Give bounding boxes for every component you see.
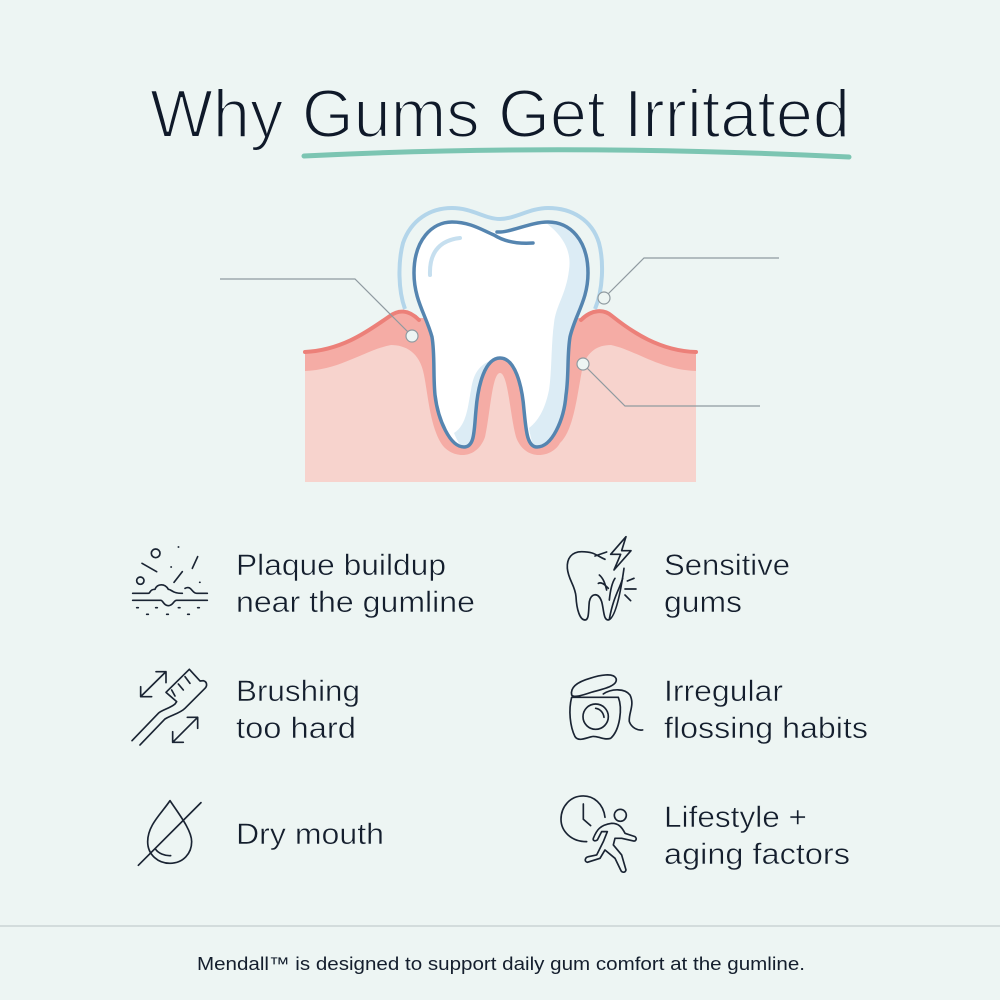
footer note: Mendall™ is designed to support daily gum comfort at the gumline. xyxy=(197,953,805,974)
icon: floss xyxy=(570,675,643,739)
text: lifestyle and aging factors: aging factors xyxy=(664,838,850,871)
enamel halo xyxy=(399,208,602,309)
text: brushing too hard: Brushing xyxy=(236,675,360,708)
tooth body xyxy=(414,222,588,447)
text: plaque buildup xyxy=(236,549,475,619)
text: irregular flossing habits xyxy=(664,675,868,745)
icon: plaque buildup xyxy=(133,547,207,614)
callout: right upper xyxy=(598,258,779,304)
icon: dry mouth drop xyxy=(138,801,201,865)
title: Why Gums Get Irritated xyxy=(150,76,850,152)
text: brushing too hard: too hard xyxy=(236,712,356,745)
icon: toothbrush xyxy=(132,669,207,745)
text: dry mouth: Dry mouth xyxy=(236,818,384,851)
gum edge line right xyxy=(581,311,696,352)
icon: sensitive tooth xyxy=(567,537,636,620)
gum tissue xyxy=(305,311,696,482)
title underline xyxy=(304,150,849,157)
text: plaque buildup: near the gumline xyxy=(236,586,475,619)
tooth outline xyxy=(414,222,588,447)
tooth and gum diagram xyxy=(305,208,696,482)
text: sensitive gums xyxy=(664,549,790,619)
gum edge line left xyxy=(305,312,419,352)
text: brushing too hard xyxy=(236,675,360,745)
tooth highlight xyxy=(430,238,460,275)
icon: clock and runner xyxy=(561,796,636,872)
text: irregular flossing habits: Irregular xyxy=(664,675,783,708)
callout: right lower xyxy=(577,358,760,406)
text: lifestyle and aging factors xyxy=(664,801,850,871)
text: plaque buildup: Plaque buildup xyxy=(236,549,446,582)
inflamed gum band xyxy=(305,311,696,455)
callout: left xyxy=(220,279,418,342)
text: lifestyle and aging factors: Lifestyle + xyxy=(664,801,807,834)
tooth shading between roots xyxy=(454,358,500,447)
text: irregular flossing habits: flossing habits xyxy=(664,712,868,745)
text: sensitive gums: gums xyxy=(664,586,742,619)
text: sensitive gums: Sensitive xyxy=(664,549,790,582)
tooth shading right xyxy=(529,223,588,447)
